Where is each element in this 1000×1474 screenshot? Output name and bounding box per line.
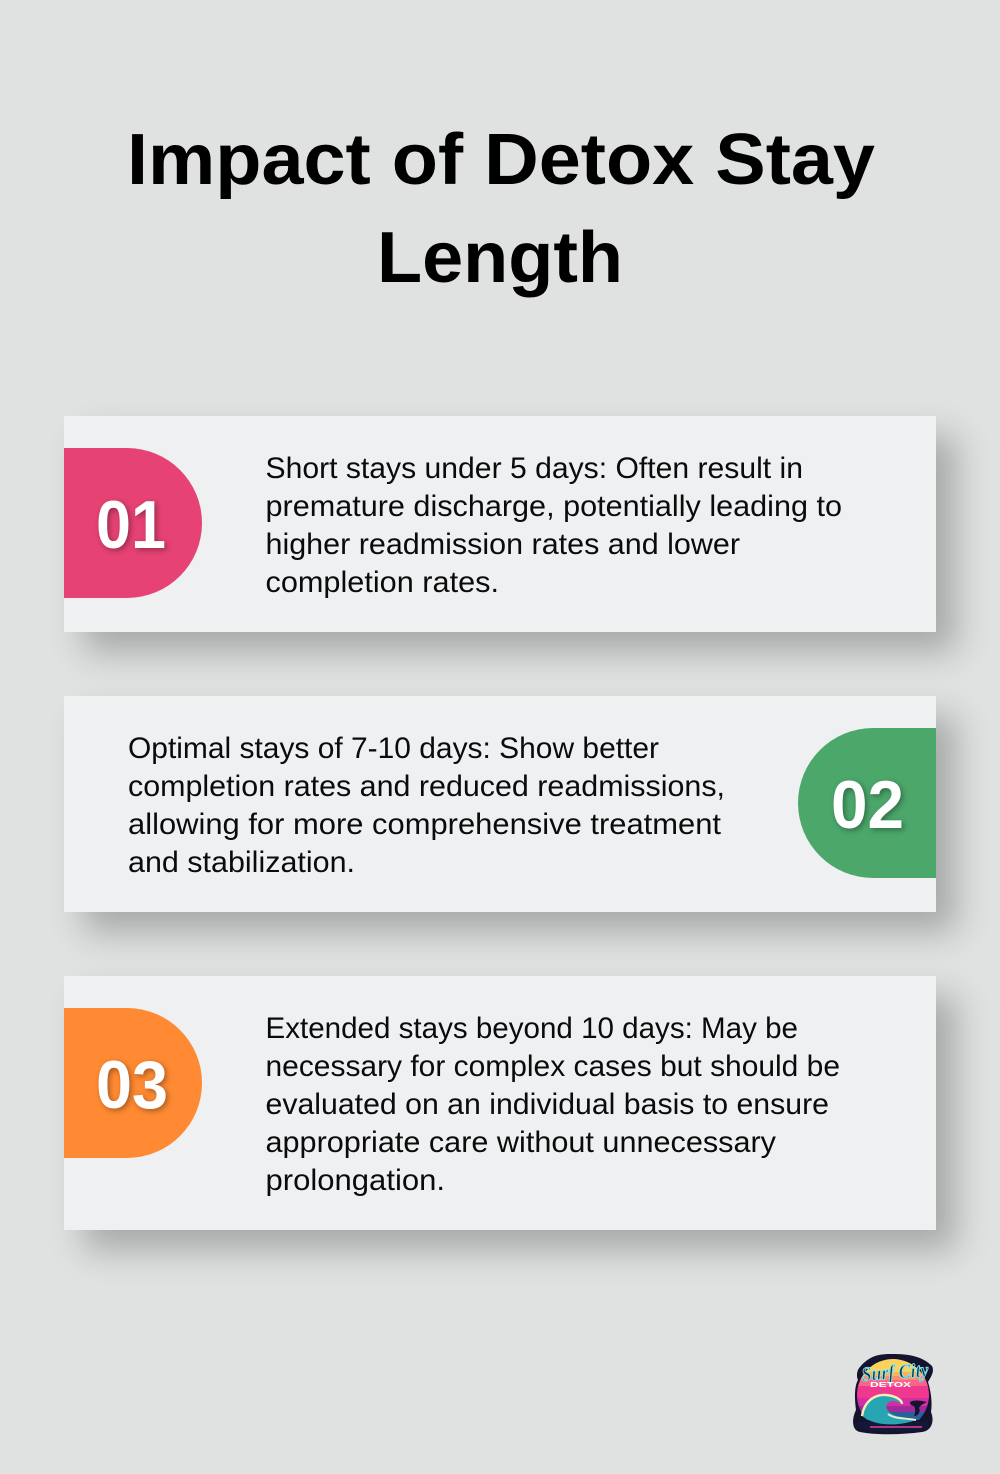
text: optimal stays [128, 732, 725, 879]
text: optimal stays: completion rates and reduced readmissions, [128, 770, 725, 803]
title: Length [377, 218, 623, 298]
panel: short stays [64, 416, 936, 632]
text: optimal stays: allowing for more comprehensive treatment [128, 808, 722, 841]
text: short stays [266, 452, 842, 599]
badge 03 [64, 1008, 202, 1158]
text: extended stays: Extended stays beyond 10 days: May be [266, 1012, 798, 1045]
text: extended stays: necessary for complex cases but should be [266, 1050, 840, 1083]
panel: extended stays [64, 976, 936, 1230]
badge 01: 01 [96, 487, 166, 563]
text: extended stays: evaluated on an individual basis to ensure [266, 1088, 829, 1121]
text: extended stays: appropriate care without unnecessary [266, 1126, 776, 1159]
badge 02: 02 [831, 767, 904, 843]
text: extended stays [266, 1012, 840, 1197]
text: short stays: Short stays under 5 days: Often result in [266, 452, 803, 485]
title: Impact of Detox Stay [127, 120, 875, 200]
text: optimal stays: Optimal stays of 7-10 days: Show better [128, 732, 659, 765]
title [127, 120, 875, 298]
badge 03: 03 [96, 1047, 168, 1123]
text: short stays: higher readmission rates and lower [266, 528, 740, 561]
text: short stays: premature discharge, potentially leading to [266, 490, 842, 523]
badge 02 [798, 728, 936, 878]
icon: logo: Surf City [861, 1359, 929, 1386]
panel: optimal stays [64, 696, 936, 912]
text: optimal stays: and stabilization. [128, 846, 355, 879]
icon: logo [853, 1354, 933, 1434]
text: extended stays: prolongation. [266, 1164, 445, 1197]
text: short stays: completion rates. [266, 566, 499, 599]
badge 01 [64, 448, 202, 598]
icon: logo: DETOX [870, 1382, 912, 1389]
